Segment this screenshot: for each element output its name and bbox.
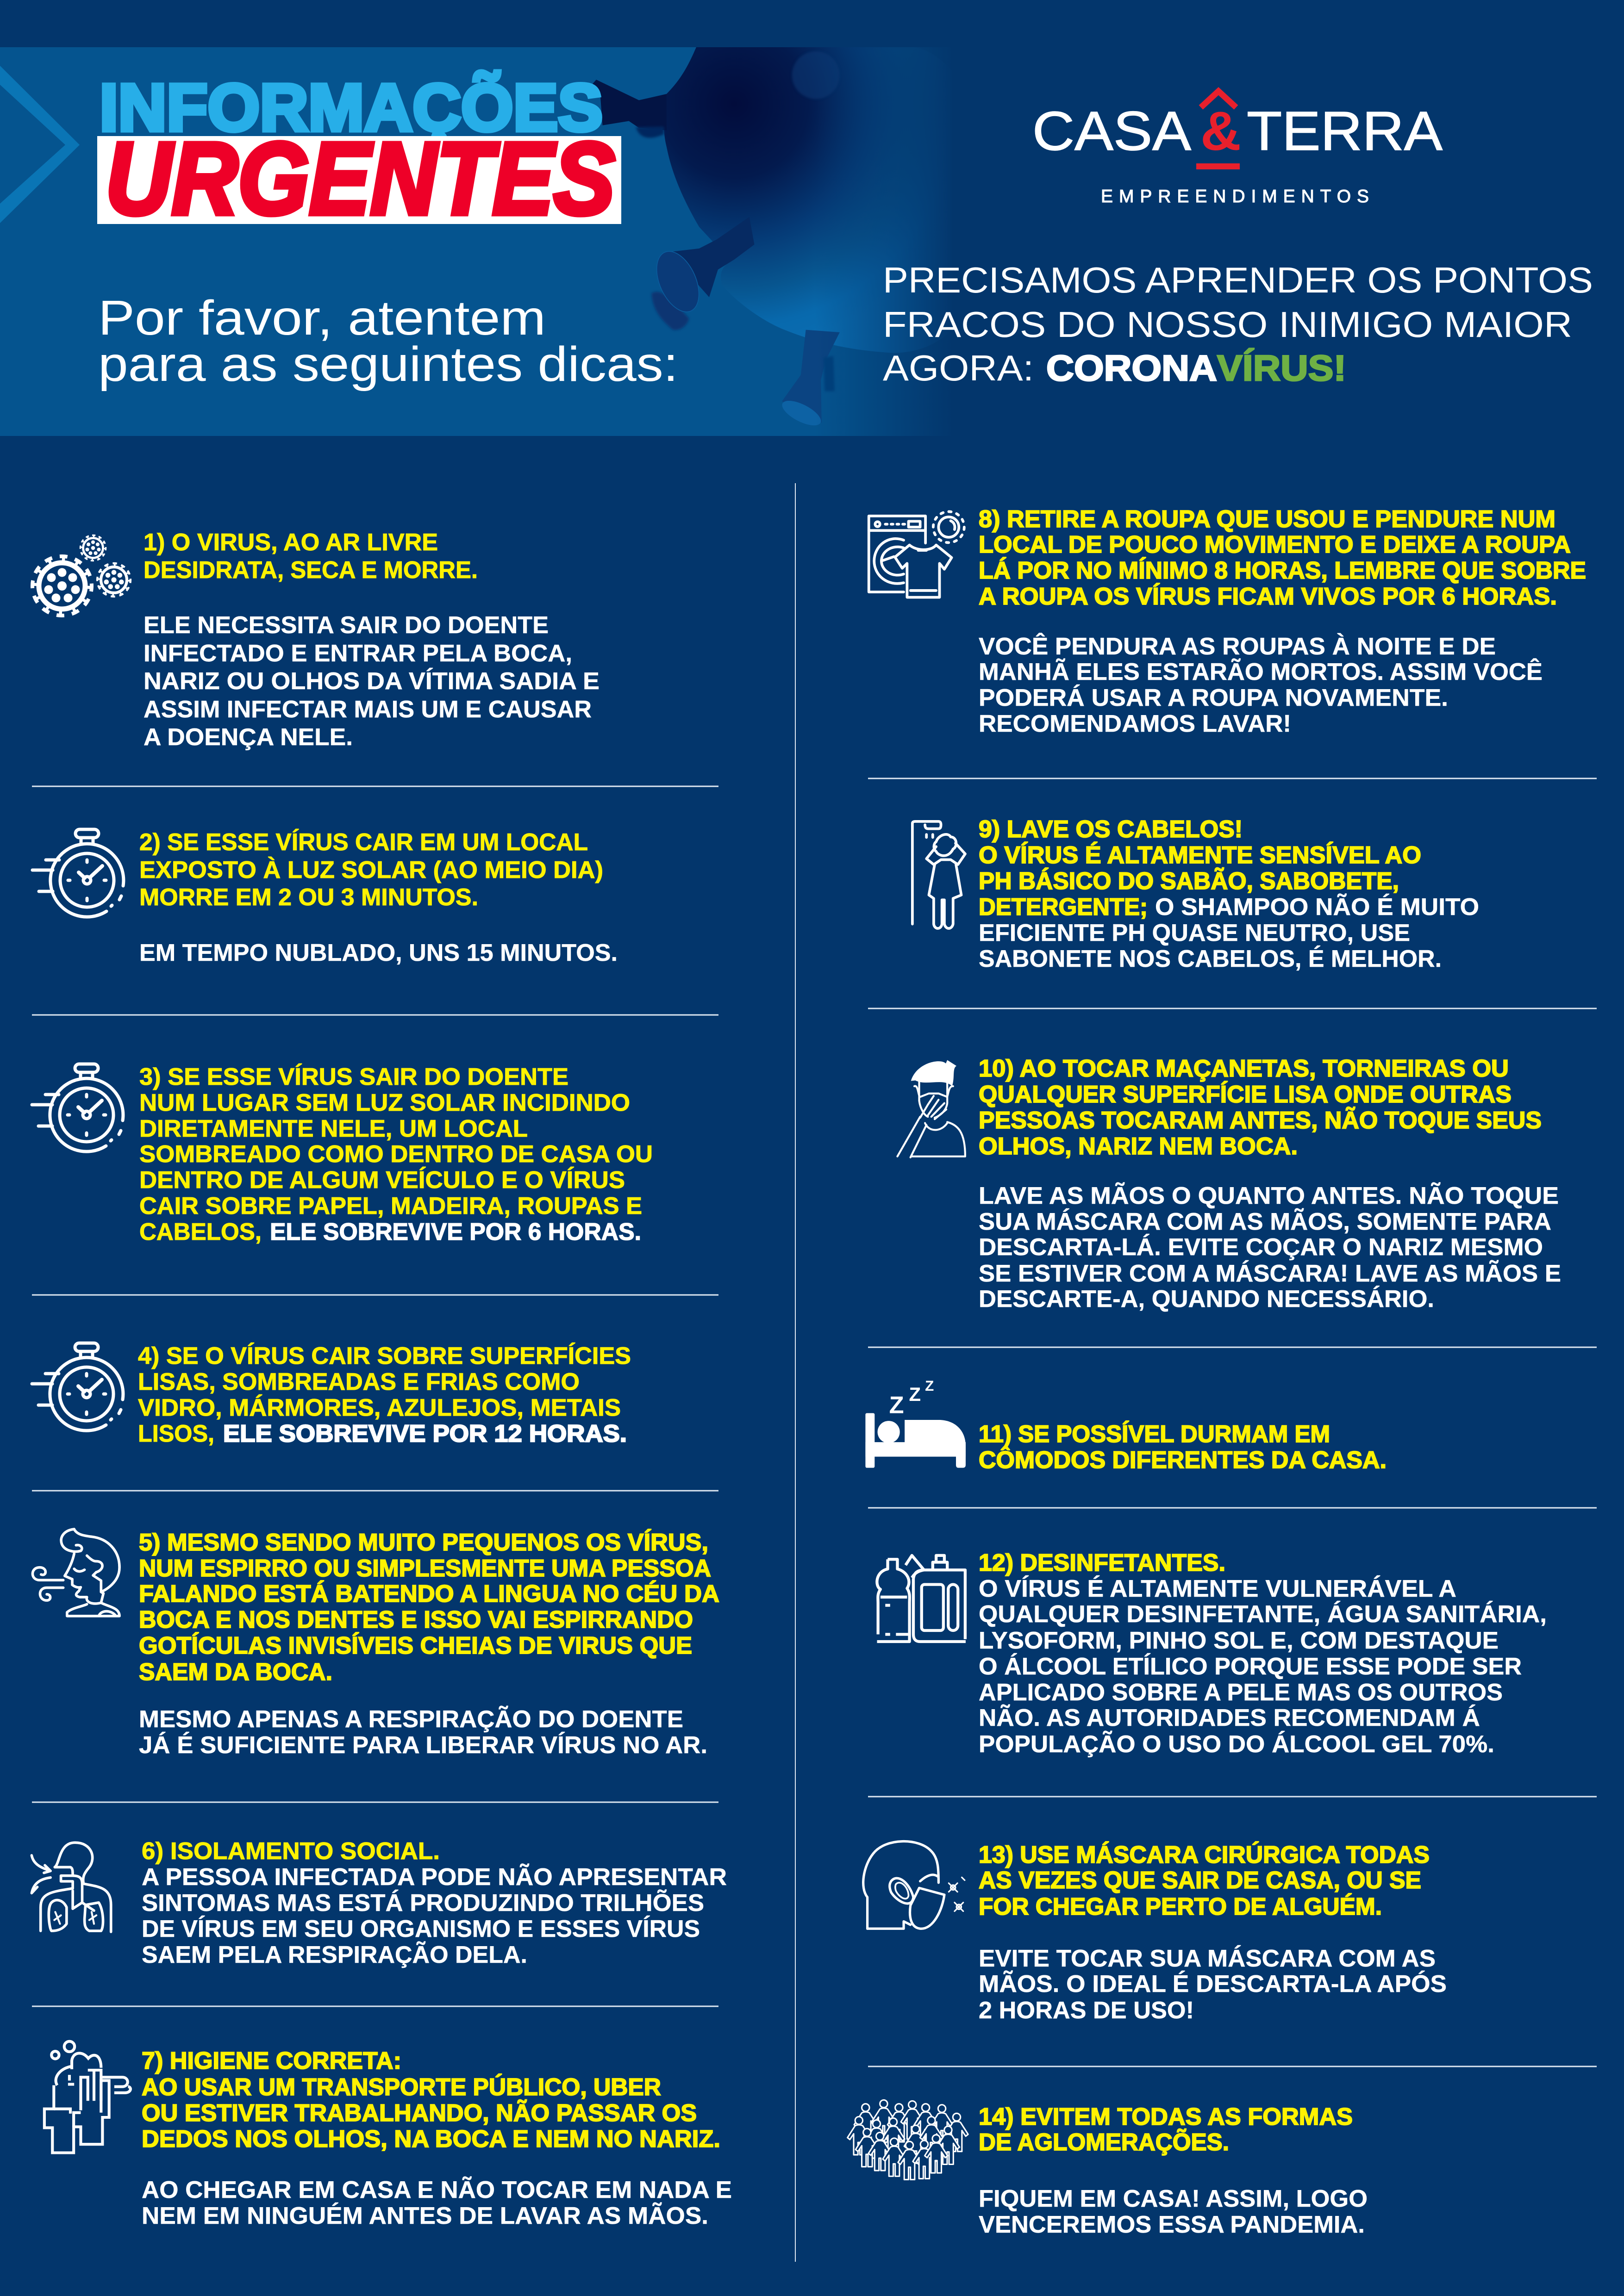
- heading: tip 14: DE AGLOMERAÇÕES.: [979, 2128, 1229, 2156]
- body: tip 2: EM TEMPO NUBLADO, UNS 15 MINUTOS.: [139, 940, 618, 966]
- text: enemy statement: FRACOS DO NOSSO INIMIGO MAIOR: [883, 304, 1572, 345]
- body: tip 8: PODERÁ USAR A ROUPA NOVAMENTE.: [979, 684, 1448, 711]
- icon: bed with sleeping person: Z: [909, 1383, 921, 1405]
- heading: tip 2: MORRE EM 2 OU 3 MINUTOS.: [139, 884, 478, 911]
- icon: lungs: [31, 1842, 111, 1932]
- heading: tip 2: EXPOSTO À LUZ SOLAR (AO MEIO DIA): [139, 857, 603, 884]
- heading: tip 9: [979, 816, 1421, 921]
- body: tip 13: 2 HORAS DE USO!: [979, 1997, 1194, 2024]
- subtitle: left: [98, 291, 678, 392]
- heading: tip 10: 10) AO TOCAR MAÇANETAS, TORNEIRAS OU: [979, 1055, 1509, 1082]
- body: tip 8: [979, 633, 1543, 737]
- text: tip 3: 3) SE ESSE VÍRUS SAIR DO DOENTE: [139, 1064, 568, 1090]
- icon: hand hygiene: [44, 2041, 131, 2153]
- text: tip 6: SAEM PELA RESPIRAÇÃO DELA.: [142, 1941, 527, 1968]
- logo: Casa & Terra: EMPREENDIMENTOS: [1101, 187, 1369, 206]
- body: tip 14: [979, 2185, 1368, 2238]
- body: tip 13: MÃOS. O IDEAL É DESCARTA-LA APÓS: [979, 1970, 1447, 1997]
- heading: tip 5: FALANDO ESTÁ BATENDO A LINGUA NO CÉU DA: [139, 1580, 719, 1607]
- heading: tip 13: AS VEZES QUE SAIR DE CASA, OU SE: [979, 1867, 1421, 1894]
- body: tip 8: VOCÊ PENDURA AS ROUPAS À NOITE E DE: [979, 633, 1496, 660]
- heading: tip 7: DEDOS NOS OLHOS, NA BOCA E NEM NO NARIZ.: [142, 2126, 720, 2153]
- icon: washing hair under shower: [912, 821, 965, 928]
- body: tip 1: INFECTADO E ENTRAR PELA BOCA,: [144, 640, 572, 667]
- icon: person touching face: [897, 1060, 965, 1157]
- icon: washing machine, shirt and sun: [869, 511, 964, 597]
- logo: Casa & Terra: TERRA: [1247, 100, 1443, 162]
- subtitle: left: Por favor, atentem: [98, 291, 546, 345]
- heading: tip 7: OU ESTIVER TRABALHANDO, NÃO PASSAR OS: [142, 2099, 697, 2127]
- heading: tip 8: [979, 506, 1586, 610]
- body: tip 14: VENCEREMOS ESSA PANDEMIA.: [979, 2211, 1365, 2238]
- heading: tip 13: [979, 1842, 1430, 1920]
- text: tip 4: LISOS,: [138, 1420, 214, 1447]
- heading: tip 10: [979, 1055, 1542, 1160]
- body: tip 10: [979, 1182, 1561, 1313]
- heading: tip 8: LOCAL DE POUCO MOVIMENTO E DEIXE A ROUPA: [979, 531, 1571, 558]
- icon: stopwatch: [32, 1343, 123, 1431]
- heading: tip 1: DESIDRATA, SECA E MORRE.: [144, 557, 478, 584]
- body: tip 10: DESCARTA-LÁ. EVITE COÇAR O NARIZ MESMO: [979, 1234, 1543, 1261]
- icon: person sneezing: [32, 1529, 119, 1616]
- body: tip 13: [979, 1945, 1447, 2024]
- panel: tip 4: [32, 1343, 631, 1447]
- heading: tip 2: 2) SE ESSE VÍRUS CAIR EM UM LOCAL: [139, 829, 588, 856]
- heading: tip 1: [144, 529, 478, 584]
- heading: tip 11: CÔMODOS DIFERENTES DA CASA.: [979, 1446, 1387, 1474]
- body: tip 5: [139, 1705, 707, 1759]
- body: tip 10: SUA MÁSCARA COM AS MÃOS, SOMENTE PARA: [979, 1208, 1551, 1235]
- text: enemy statement: PRECISAMOS APRENDER OS PONTOS: [883, 260, 1593, 300]
- icon: chevron arrow: [0, 66, 80, 223]
- heading: tip 10: QUALQUER SUPERFÍCIE LISA ONDE OUTRAS: [979, 1081, 1512, 1108]
- heading: tip 9: DETERGENTE;: [979, 894, 1148, 921]
- body: tip 1: [144, 612, 600, 751]
- text: tip 6: DE VÍRUS EM SEU ORGANISMO E ESSES VÍRUS: [142, 1916, 700, 1942]
- panel: tip 5: [32, 1529, 719, 1759]
- heading: tip 9: O VÍRUS É ALTAMENTE SENSÍVEL AO: [979, 842, 1421, 869]
- heading: tip 7: 7) HIGIENE CORRETA:: [142, 2047, 401, 2074]
- panel: header banner background with virus: [0, 46, 993, 436]
- heading: tip 8: 8) RETIRE A ROUPA QUE USOU E PENDURE NUM: [979, 506, 1555, 533]
- body: tip 9: [979, 893, 1479, 972]
- heading: tip 14: 14) EVITEM TODAS AS FORMAS: [979, 2103, 1353, 2130]
- heading: tip 11: [979, 1421, 1387, 1474]
- text: tip 6: 6) ISOLAMENTO SOCIAL.: [142, 1838, 440, 1865]
- text: tip 3: CAIR SOBRE PAPEL, MADEIRA, ROUPAS E: [139, 1193, 642, 1220]
- body: tip 9: SABONETE NOS CABELOS, É MELHOR.: [979, 946, 1442, 972]
- heading: tip 5: BOCA E NOS DENTES E ISSO VAI ESPIRRANDO: [139, 1606, 693, 1633]
- heading: tip 10: PESSOAS TOCARAM ANTES, NÃO TOQUE SEUS: [979, 1107, 1542, 1134]
- heading: tip 8: A ROUPA OS VÍRUS FICAM VIVOS POR 6 HORAS.: [979, 583, 1557, 610]
- panel: tip 3: [32, 1064, 653, 1245]
- body: tip 10: DESCARTE-A, QUANDO NECESSÁRIO.: [979, 1286, 1434, 1313]
- text: tip 12: LYSOFORM, PINHO SOL E, COM DESTAQUE: [979, 1627, 1499, 1654]
- divider: central column line: [795, 483, 796, 2262]
- body: tip 10: SE ESTIVER COM A MÁSCARA! LAVE AS MÃOS E: [979, 1260, 1561, 1287]
- text: enemy statement: [883, 260, 1593, 388]
- body: tip 9: O SHAMPOO NÃO É MUITO: [1155, 893, 1479, 921]
- text: tip 3: ELE SOBREVIVE POR 6 HORAS.: [270, 1219, 641, 1245]
- panel: tip 1: [32, 529, 600, 751]
- text: tip 3: DIRETAMENTE NELE, UM LOCAL: [139, 1115, 528, 1142]
- text: tip 3: SOMBREADO COMO DENTRO DE CASA OU: [139, 1141, 653, 1168]
- heading: tip 5: GOTÍCULAS INVISÍVEIS CHEIAS DE VIRUS QUE: [139, 1632, 692, 1659]
- body: tip 5: MESMO APENAS A RESPIRAÇÃO DO DOENTE: [139, 1705, 683, 1733]
- text: tip 12: O ÁLCOOL ETÍLICO PORQUE ESSE PODE SER: [979, 1653, 1522, 1680]
- icon: head with surgical mask: [863, 1842, 965, 1929]
- icon: stopwatch: [32, 829, 124, 917]
- text: tip 3: DENTRO DE ALGUM VEÍCULO E O VÍRUS: [139, 1167, 625, 1194]
- heading: tip 9: PH BÁSICO DO SABÃO, SABOBETE,: [979, 867, 1399, 895]
- text: tip 4: VIDRO, MÁRMORES, AZULEJOS, METAIS: [138, 1394, 621, 1421]
- heading: tip 1: 1) O VIRUS, AO AR LIVRE: [144, 529, 438, 556]
- body: tip 10: LAVE AS MÃOS O QUANTO ANTES. NÃO TOQUE: [979, 1182, 1559, 1209]
- body: tip 1: A DOENÇA NELE.: [144, 724, 353, 751]
- heading: tip 13: 13) USE MÁSCARA CIRÚRGICA TODAS: [979, 1842, 1430, 1868]
- heading: tip 5: [139, 1529, 719, 1686]
- body: tip 7: [142, 2176, 732, 2229]
- panel: tip 9: [912, 816, 1479, 972]
- body: tip 7: NEM EM NINGUÉM ANTES DE LAVAR AS MÃOS.: [142, 2202, 708, 2229]
- logo: Casa & Terra: [1032, 91, 1443, 206]
- icon: crowd: [848, 2100, 968, 2179]
- panel: tip 14: [848, 2100, 1368, 2238]
- heading: tip 13: FOR CHEGAR PERTO DE ALGUÉM.: [979, 1893, 1382, 1920]
- text: tip 3: CABELOS,: [139, 1219, 262, 1245]
- text: tip 12: QUALQUER DESINFETANTE, ÁGUA SANITÁRIA,: [979, 1601, 1547, 1628]
- body: tip 14: FIQUEM EM CASA! ASSIM, LOGO: [979, 2185, 1368, 2212]
- heading: tip 7: [142, 2047, 720, 2153]
- heading: tip 11: 11) SE POSSÍVEL DURMAM EM: [979, 1421, 1330, 1448]
- text: tip 12: APLICADO SOBRE A PELE MAS OS OUTROS: [979, 1679, 1503, 1706]
- body: tip 1: NARIZ OU OLHOS DA VÍTIMA SADIA E: [144, 668, 600, 695]
- panel: tip 11: [865, 1378, 1387, 1474]
- text: tip 12: O VÍRUS É ALTAMENTE VULNERÁVEL A: [979, 1575, 1456, 1602]
- panel: tip 7: [44, 2041, 732, 2229]
- icon: disinfectant bottles: [877, 1556, 966, 1642]
- subtitle: left: para as seguintes dicas:: [98, 337, 678, 392]
- body: tip 13: EVITE TOCAR SUA MÁSCARA COM AS: [979, 1945, 1436, 1972]
- text: enemy statement: CORONA: [1046, 348, 1217, 388]
- heading: tip 5: NUM ESPIRRO OU SIMPLESMENTE UMA PESSOA: [139, 1555, 711, 1582]
- text: tip 4: 4) SE O VÍRUS CAIR SOBRE SUPERFÍCIES: [138, 1343, 631, 1369]
- text: tip 12: 12) DESINFETANTES.: [979, 1549, 1225, 1576]
- body: tip 7: AO CHEGAR EM CASA E NÃO TOCAR EM NADA E: [142, 2176, 732, 2203]
- text: tip 4: ELE SOBREVIVE POR 12 HORAS.: [223, 1420, 627, 1447]
- panel: tip 2: [32, 829, 618, 966]
- panel: tip 6: [31, 1838, 727, 1968]
- body: tip 8: RECOMENDAMOS LAVAR!: [979, 710, 1291, 737]
- text: tip 4: [138, 1343, 631, 1447]
- heading: tip 2: [139, 829, 603, 911]
- icon: bed with sleeping person: Z: [889, 1392, 904, 1419]
- text: enemy statement: AGORA:: [883, 348, 1034, 388]
- text: tip 6: [142, 1838, 727, 1968]
- text: tip 6: SINTOMAS MAS ESTÁ PRODUZINDO TRILHÕES: [142, 1889, 704, 1916]
- text: tip 12: [979, 1549, 1547, 1758]
- body: tip 1: ASSIM INFECTAR MAIS UM E CAUSAR: [144, 696, 592, 723]
- heading: tip 7: AO USAR UM TRANSPORTE PÚBLICO, UBER: [142, 2074, 661, 2101]
- icon: stopwatch: [32, 1064, 123, 1151]
- panel: tip 13: [863, 1842, 1447, 2024]
- logo: Casa & Terra: &: [1200, 100, 1241, 162]
- text: tip 12: POPULAÇÃO O USO DO ÁLCOOL GEL 70%.: [979, 1730, 1494, 1758]
- text: enemy statement: VÍRUS!: [1217, 348, 1346, 388]
- heading box: Urgentes: URGENTES: [106, 121, 615, 236]
- panel: tip 8: [869, 506, 1586, 737]
- body: tip 8: MANHÃ ELES ESTARÃO MORTOS. ASSIM VOCÊ: [979, 658, 1543, 685]
- icon: bed with sleeping person: [865, 1378, 966, 1468]
- logo: Casa & Terra: CASA: [1032, 100, 1192, 162]
- heading: tip 5: 5) MESMO SENDO MUITO PEQUENOS OS VÍRUS,: [139, 1529, 708, 1556]
- heading: tip 5: SAEM DA BOCA.: [139, 1659, 332, 1686]
- heading: tip 8: LÁ POR NO MÍNIMO 8 HORAS, LEMBRE QUE SOBRE: [979, 557, 1586, 584]
- body: tip 9: EFICIENTE PH QUASE NEUTRO, USE: [979, 920, 1410, 946]
- text: tip 12: NÃO. AS AUTORIDADES RECOMENDAM Á: [979, 1704, 1480, 1731]
- icon: bed with sleeping person: Z: [925, 1378, 934, 1394]
- body: tip 5: JÁ É SUFICIENTE PARA LIBERAR VÍRUS NO AR.: [139, 1732, 707, 1759]
- text: tip 4: LISAS, SOMBREADAS E FRIAS COMO: [138, 1369, 580, 1395]
- heading: tip 14: [979, 2103, 1353, 2156]
- text: tip 3: [139, 1064, 653, 1245]
- heading: tip 10: OLHOS, NARIZ NEM BOCA.: [979, 1133, 1298, 1160]
- text: tip 6: A PESSOA INFECTADA PODE NÃO APRESENTAR: [142, 1863, 727, 1891]
- text: tip 3: NUM LUGAR SEM LUZ SOLAR INCIDINDO: [139, 1089, 630, 1116]
- panel: tip 12: [877, 1549, 1547, 1758]
- panel: tip 10: [897, 1055, 1561, 1313]
- heading: Informações: INFORMAÇÕES: [100, 70, 603, 145]
- icon: viruses: [32, 535, 131, 616]
- heading: tip 9: 9) LAVE OS CABELOS!: [979, 816, 1243, 843]
- body: tip 1: ELE NECESSITA SAIR DO DOENTE: [144, 612, 549, 639]
